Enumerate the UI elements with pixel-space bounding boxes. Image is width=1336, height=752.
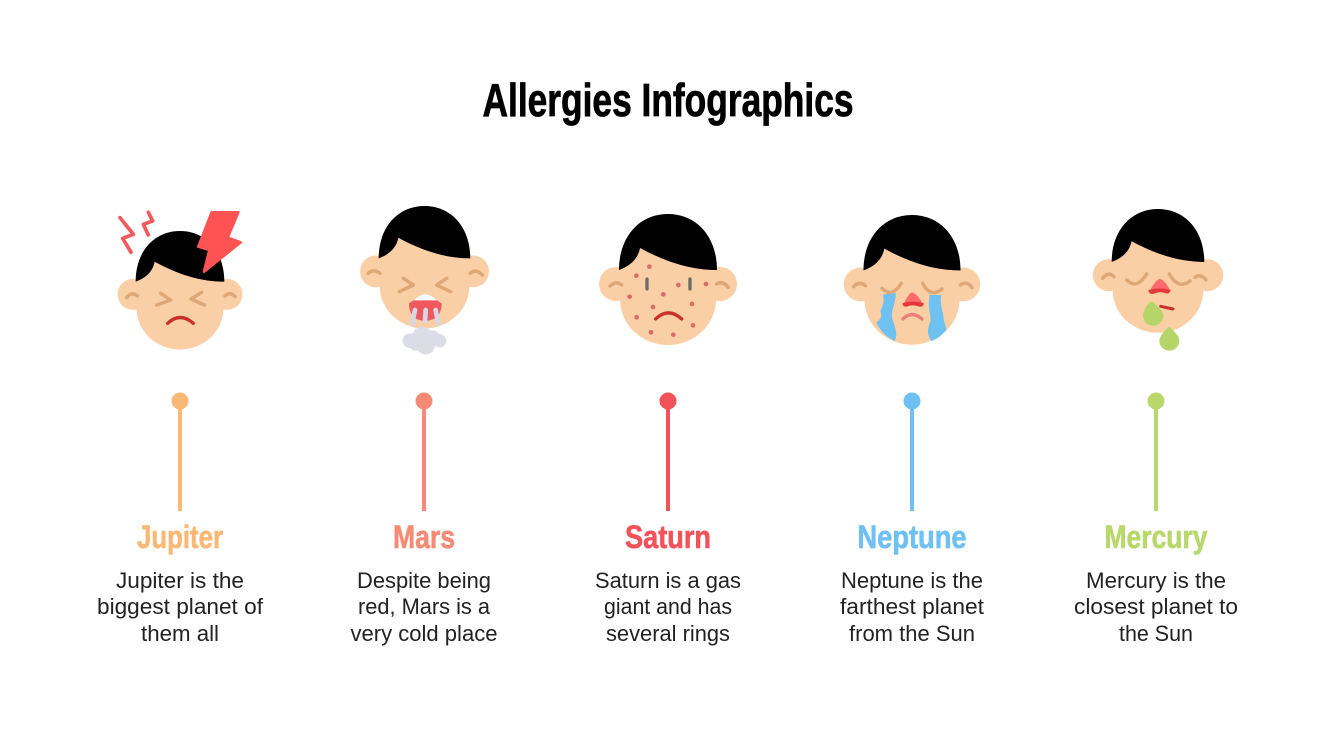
text: Neptune description: from the Sun <box>849 621 975 646</box>
text: Neptune description: Neptune is the <box>841 568 983 593</box>
text: Mercury description: closest planet to <box>1074 594 1238 619</box>
text: Neptune description: farthest planet <box>840 594 984 619</box>
text: Jupiter description: them all <box>141 621 219 646</box>
icon: face sneezing <box>360 206 489 354</box>
text: Neptune description <box>840 568 984 646</box>
panel: Neptune <box>840 215 984 646</box>
text: Mars description: Despite being <box>357 568 491 593</box>
panel: Mars <box>350 206 498 646</box>
heading: Mars: Mars <box>393 519 455 555</box>
text: Saturn description: several rings <box>606 621 730 646</box>
text: Saturn description <box>595 568 741 646</box>
heading: Neptune: Neptune <box>858 519 966 555</box>
pin: Jupiter <box>172 392 188 511</box>
text: Saturn description: giant and has <box>604 594 732 619</box>
text: Jupiter description: biggest planet of <box>97 594 264 619</box>
icon: face crying <box>844 215 980 345</box>
text: Saturn description: Saturn is a gas <box>595 568 741 593</box>
heading: Jupiter: Jupiter <box>137 519 223 555</box>
text: Mars description: red, Mars is a <box>358 594 491 619</box>
text: Mars description <box>350 568 498 646</box>
icon: face with rash <box>599 214 737 345</box>
panel: Mercury <box>1074 209 1238 646</box>
text: Mercury description: Mercury is the <box>1086 568 1226 593</box>
text: Mars description: very cold place <box>350 621 498 646</box>
icon: face with runny nose <box>1093 209 1223 351</box>
panel: Saturn <box>595 214 741 646</box>
text: Jupiter description <box>97 568 264 646</box>
text: Mercury description <box>1074 568 1238 646</box>
text: Jupiter description: Jupiter is the <box>116 568 244 593</box>
icon: face with headache <box>118 212 242 350</box>
heading: Mercury: Mercury <box>1104 519 1208 555</box>
heading: Saturn: Saturn <box>625 519 711 555</box>
pin: Mercury <box>1148 392 1164 511</box>
pin: Neptune <box>904 392 920 511</box>
title: Allergies Infographics <box>482 74 854 126</box>
pin: Saturn <box>660 392 676 511</box>
panel: Jupiter <box>97 212 264 646</box>
pin: Mars <box>416 392 432 511</box>
text: Mercury description: the Sun <box>1119 621 1193 646</box>
